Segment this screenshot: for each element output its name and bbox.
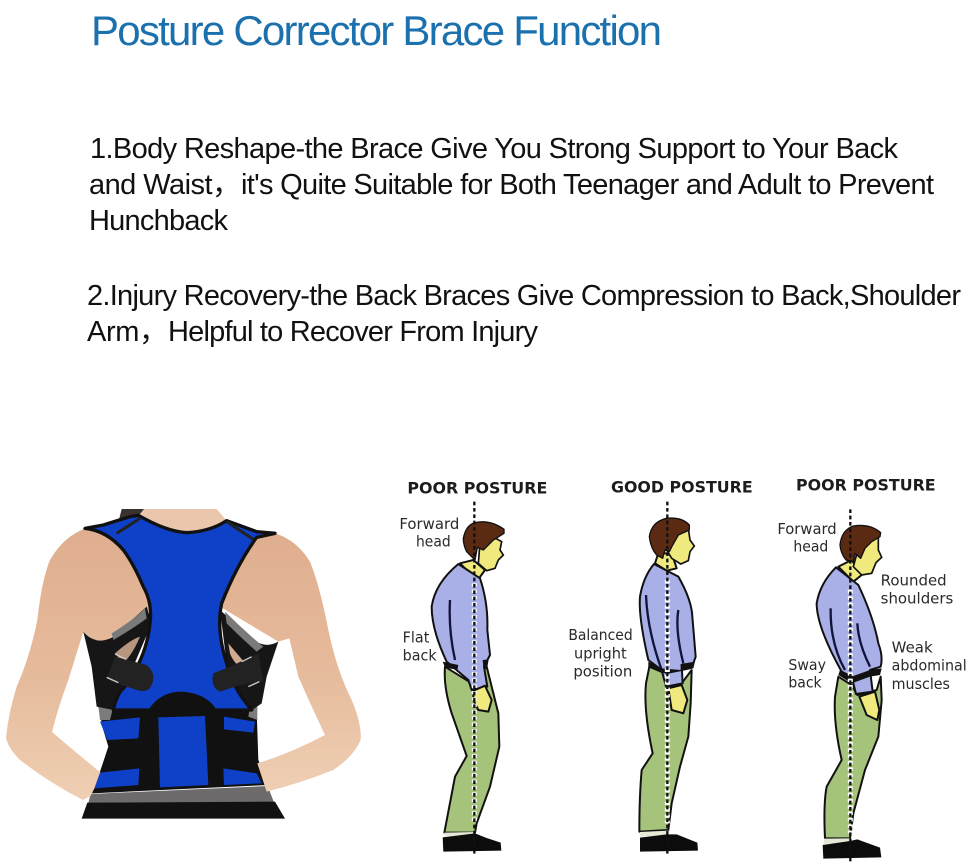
side grey strips: [98, 705, 257, 720]
figure: [639, 502, 698, 855]
neck: [138, 509, 227, 533]
label: sway back: [788, 657, 826, 692]
label: balanced upright position: position: [573, 664, 632, 681]
title: Posture Corrector Brace Function: [91, 7, 662, 54]
label: sway back: Sway: [788, 657, 826, 674]
label: forward head: [777, 521, 837, 556]
text block: function 2 injury recovery: 2.Injury Recovery-the Back Braces Give Compression to Back,Shoulder: [87, 280, 961, 312]
label: rounded shoulders: shoulders: [881, 590, 953, 607]
left strap: [107, 657, 153, 691]
label: balanced upright position: Balanced: [568, 627, 633, 644]
photo: woman wearing blue posture brace: [6, 509, 361, 819]
heading: POOR POSTURE: [407, 478, 547, 497]
label: weak abdominal muscles: Weak: [892, 639, 933, 656]
lumbar arch: [148, 692, 217, 710]
label: weak abdominal muscles: abdominal: [892, 658, 967, 675]
text block: function 2 injury recovery: Helpful to Recover From Injury: [168, 316, 538, 348]
text block: function 2 injury recovery: Arm，: [87, 316, 168, 348]
label: flat back: [403, 630, 437, 665]
text block: function 1 body reshape: it's Quite Suitable for Both Teenager and Adult to Prevent: [241, 169, 934, 201]
label: forward head: Forward: [777, 521, 837, 538]
label: weak abdominal muscles: [892, 639, 967, 693]
figure: [432, 502, 504, 855]
waist belt base: [92, 707, 268, 793]
right arm and shoulder: [220, 533, 361, 792]
text block: function 1 body reshape: [89, 133, 934, 237]
hair at neck: [119, 509, 144, 518]
label: forward head: [399, 516, 459, 551]
label: forward head: Forward: [399, 516, 459, 533]
text block: function 1 body reshape: Hunchback: [89, 205, 228, 237]
posture diagram: poor posture flat back: [399, 478, 547, 855]
text block: function 2 injury recovery: [87, 280, 961, 348]
heading: POOR POSTURE: [796, 476, 936, 495]
label: forward head: head: [793, 539, 828, 556]
label: flat back: back: [403, 648, 437, 665]
label: flat back: Flat: [403, 630, 430, 647]
label: forward head: head: [416, 534, 451, 551]
grey waistband: [87, 786, 275, 807]
label: balanced upright position: [568, 627, 633, 681]
text block: function 1 body reshape: and Waist，: [89, 169, 241, 201]
belt blue panels: [100, 717, 140, 740]
label: weak abdominal muscles: muscles: [892, 676, 950, 693]
posture diagram: poor posture sway back: [777, 476, 967, 863]
left arm and shoulder: [6, 529, 150, 800]
label: rounded shoulders: [881, 573, 953, 607]
figure: [817, 509, 882, 863]
black trousers: [82, 802, 285, 819]
right strap: [212, 653, 263, 692]
heading: GOOD POSTURE: [611, 478, 753, 497]
left side black panel: [83, 607, 152, 710]
text block: function 1 body reshape: 1.Body Reshape-the Brace Give You Strong Support to Your Back: [90, 133, 898, 165]
label: rounded shoulders: Rounded: [881, 573, 947, 590]
posture diagram: good posture: [568, 478, 753, 855]
right side black panel: [220, 610, 278, 712]
label: balanced upright position: upright: [574, 645, 627, 662]
blue back panel: [85, 515, 275, 710]
shoulder strap seams: [117, 518, 253, 539]
label: sway back: back: [788, 675, 822, 692]
